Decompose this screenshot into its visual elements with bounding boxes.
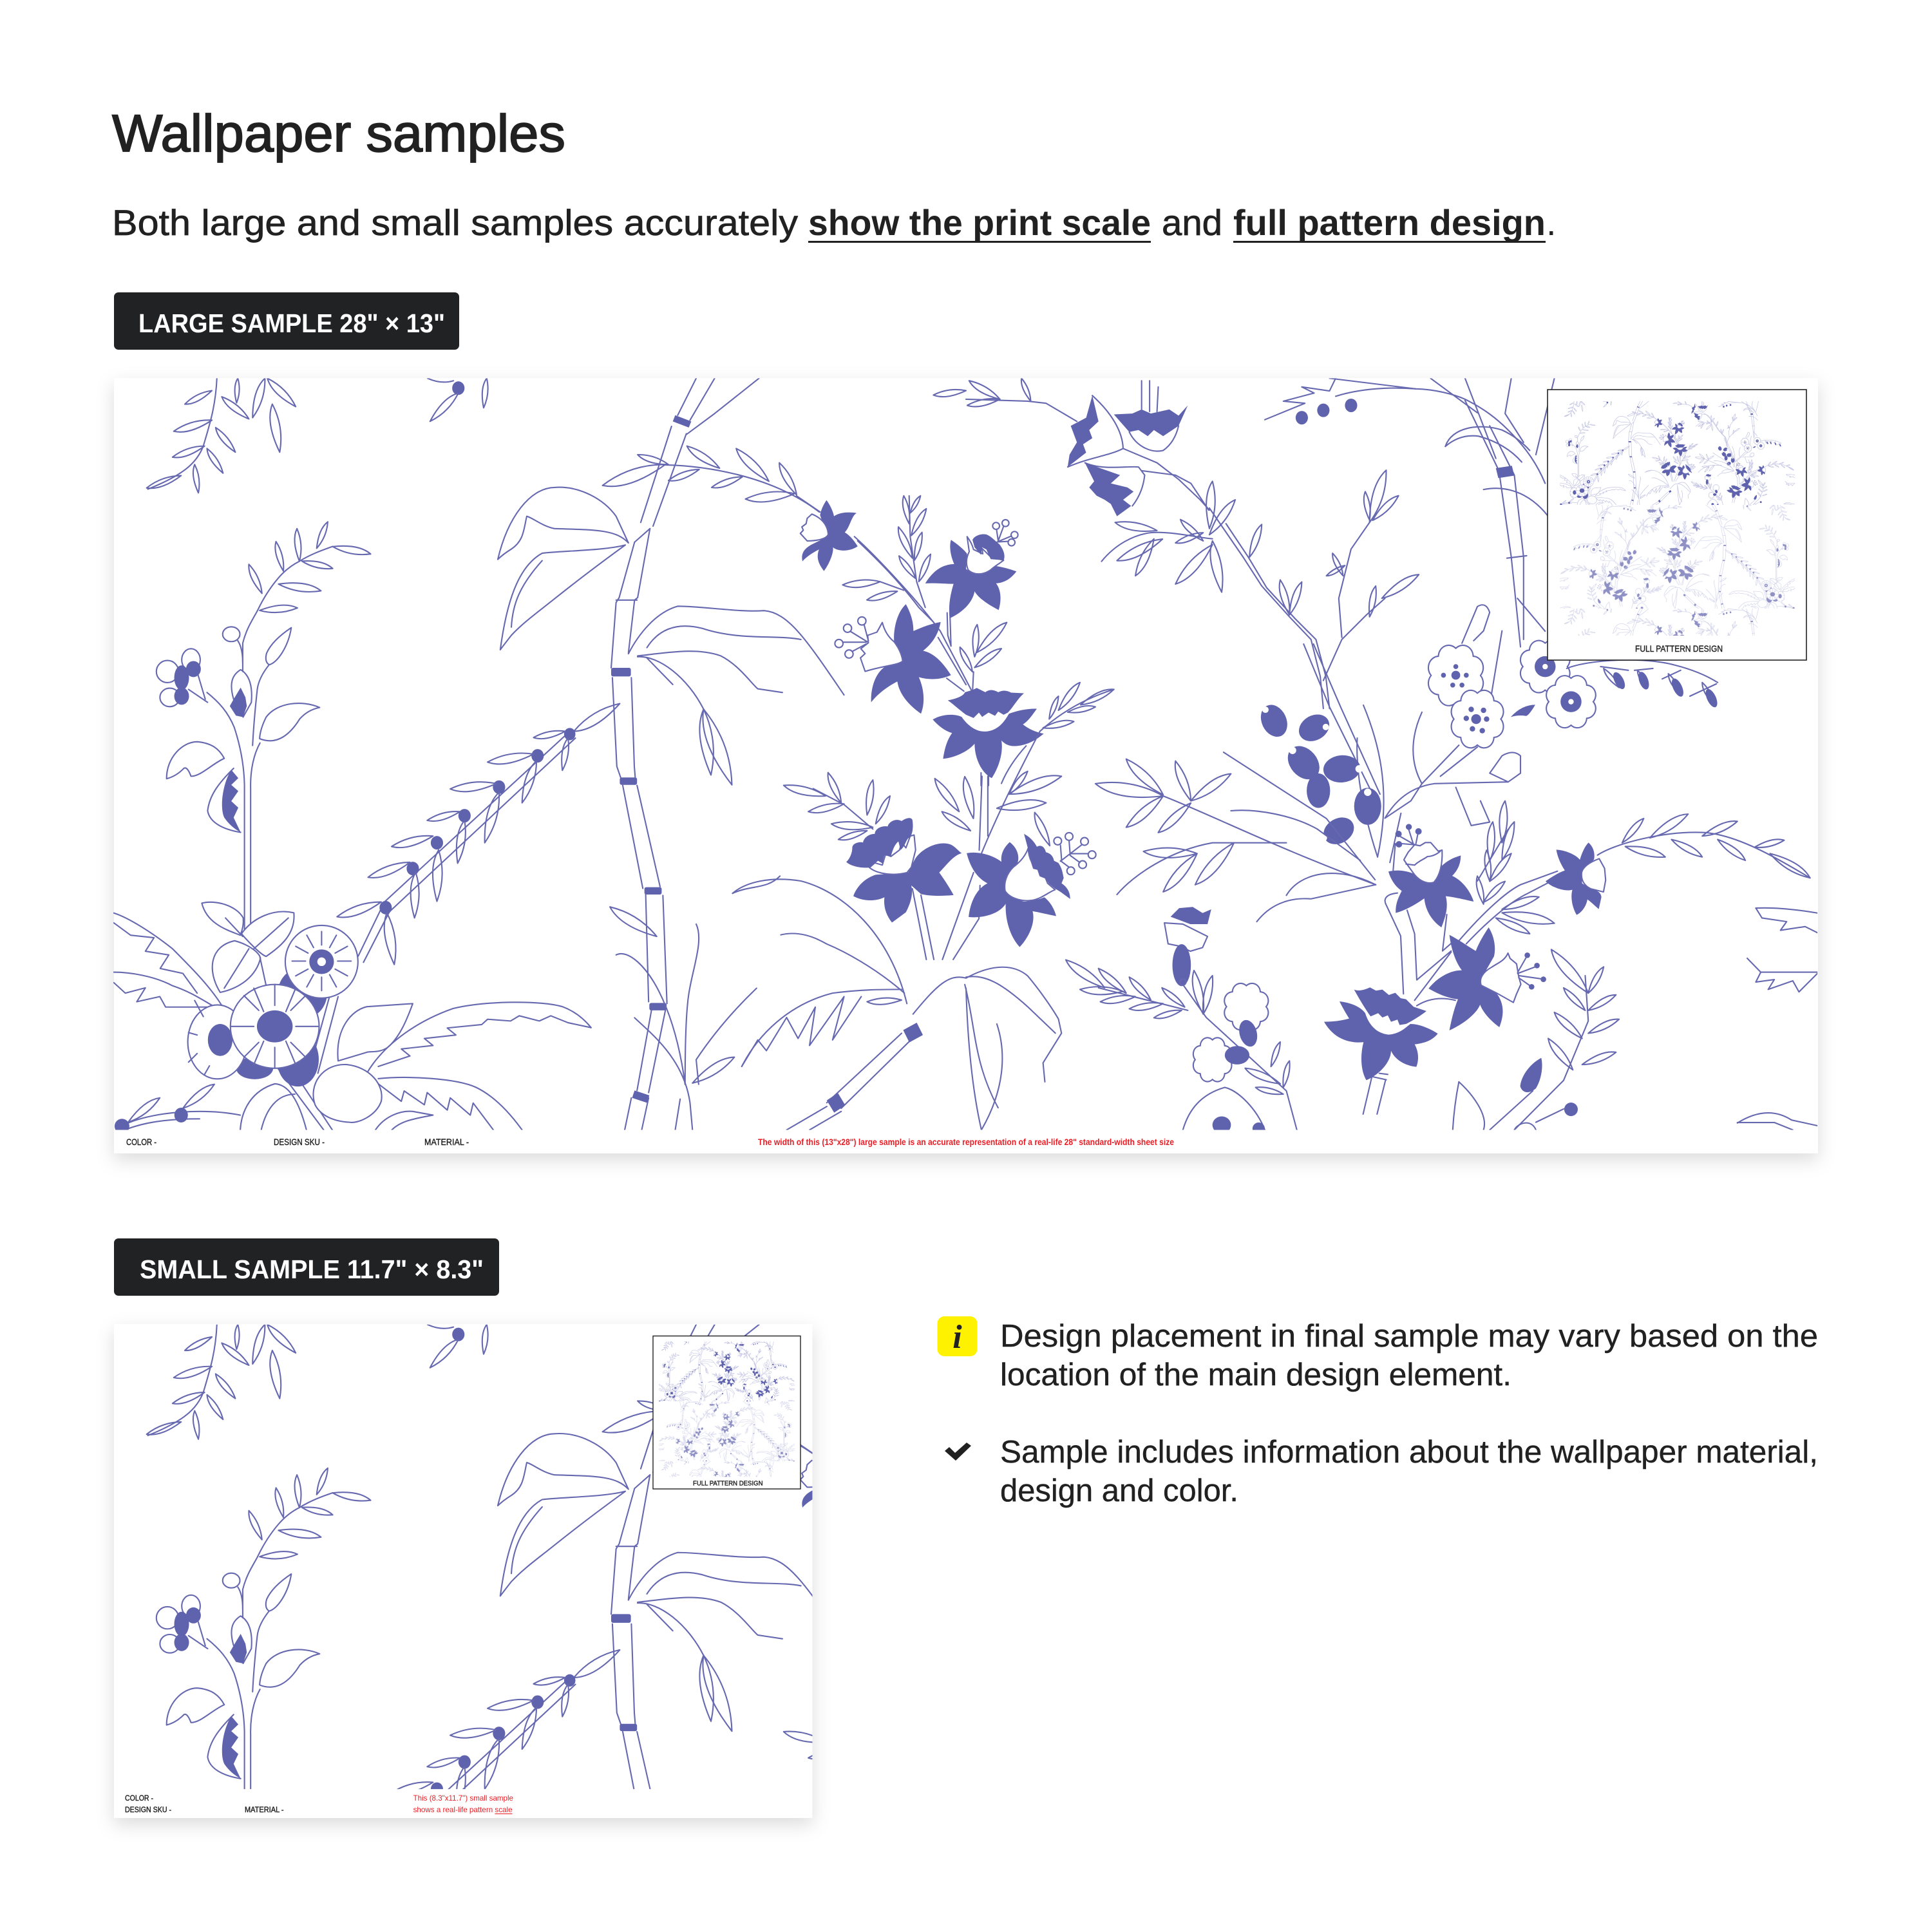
flower 9 — [1546, 842, 1605, 915]
lower left ferns — [114, 913, 591, 1133]
diagonal branch with nodes — [336, 699, 623, 965]
top middle sprig — [427, 378, 489, 424]
subtitle: Both large and small samples accurately — [112, 202, 798, 243]
lower left large leaves — [202, 902, 382, 1122]
small sample footer labels: shows a real-life pattern scale — [413, 1805, 513, 1814]
central flower 2 — [925, 520, 1018, 618]
panel: large sample — [108, 378, 1824, 1166]
large sample floral artwork — [113, 378, 1817, 1130]
badge: large sample: LARGE SAMPLE 28" × 13" — [138, 308, 445, 338]
lower right sprig — [1453, 947, 1620, 1130]
top left sprig — [146, 376, 298, 493]
central flower 4 — [933, 688, 1044, 786]
lower left round flowers — [188, 925, 358, 1086]
top right twig with berries — [1265, 378, 1555, 705]
large sample footer labels — [126, 1137, 1174, 1147]
small sample footer labels: DESIGN SKU - — [125, 1805, 171, 1814]
stems around flower 8 — [1386, 904, 1403, 994]
large sample footer labels: MATERIAL - — [424, 1137, 469, 1147]
badge: large sample — [114, 292, 459, 350]
flower 11 — [1428, 927, 1546, 1030]
note: sample information: design and color. — [1000, 1473, 1238, 1508]
sprig left of flower 5 — [782, 772, 893, 842]
centre right branches — [1101, 469, 1421, 708]
note: design placement: location of the main design element. — [1000, 1358, 1511, 1392]
bamboo main cane lower — [625, 887, 667, 1130]
large sample footer labels: DESIGN SKU - — [274, 1137, 325, 1147]
small sample footer labels — [125, 1794, 513, 1814]
small sample inset: full pattern design — [650, 1311, 804, 1522]
flower 8 — [1385, 824, 1473, 927]
carnation and lower sprig — [1063, 907, 1297, 1130]
twig with dark buds — [1567, 660, 1719, 709]
icon: yellow info badge: i — [952, 1319, 962, 1356]
central flowers 2, 3 and 4 with sprig — [835, 495, 1044, 786]
large sample footer labels: COLOR - — [126, 1137, 156, 1147]
note: sample information — [945, 1435, 1818, 1508]
note: sample information: Sample includes information about the wallpaper material, — [1000, 1435, 1818, 1470]
badge: small sample — [114, 1238, 499, 1296]
central lower leaves and stem — [732, 876, 1061, 1130]
central flower 3 — [835, 604, 951, 714]
large sample footer labels: The width of this (13"x28") large sample is an accurate representation of a real-life 28" standard-width sheet size — [758, 1137, 1174, 1147]
note: design placement: Design placement in final sample may vary based on the — [1000, 1319, 1818, 1354]
small sample footer labels: This (8.3"x11.7") small sample — [413, 1794, 513, 1803]
bamboo leaves — [498, 452, 844, 788]
large sample inset: full pattern design — [1544, 349, 1811, 713]
round flowers — [1428, 641, 1596, 748]
subtitle: . — [1546, 202, 1557, 243]
title: Wallpaper samples — [112, 104, 565, 163]
top centre flowers — [933, 377, 1209, 516]
icon: yellow info badge — [938, 1316, 978, 1356]
panel: small sample — [0, 945, 940, 1911]
bamboo main cane upper — [611, 378, 715, 888]
bamboo lower side leaves — [607, 903, 757, 1130]
lower small flowers — [1183, 983, 1292, 1135]
branch to the top right of bamboo — [665, 378, 819, 512]
central sprig — [842, 495, 1009, 694]
right edge ferns — [1738, 908, 1817, 1130]
badge: small sample: SMALL SAMPLE 11.7" × 8.3" — [140, 1255, 484, 1284]
subtitle: full pattern design — [1233, 202, 1546, 243]
small sample footer labels: COLOR - — [125, 1794, 153, 1803]
subtitle: show the print scale — [808, 202, 1151, 243]
stem and sprig right of flower 4 — [931, 680, 1115, 853]
icon: check mark — [945, 1443, 971, 1461]
left plant upper — [156, 521, 372, 936]
dark bud — [1520, 1058, 1542, 1092]
subtitle: and — [1162, 202, 1222, 243]
central flowers 5 and 6 — [846, 811, 1096, 960]
central flower 1 — [797, 496, 940, 631]
flower 10 — [1324, 987, 1438, 1114]
subtitle — [112, 202, 1557, 243]
dark berries cluster — [1256, 644, 1520, 862]
note: design placement — [938, 1316, 1818, 1392]
sprig right of flower 8 and branch to flower 9 — [1459, 800, 1812, 944]
left branches of right plant — [1094, 752, 1376, 922]
large sample inset: full pattern design: FULL PATTERN DESIGN — [1635, 643, 1723, 654]
right plant flowers 8, 9, 10 and 11 — [1324, 824, 1605, 1114]
small sample floral artwork — [0, 945, 940, 1911]
small sample inset: full pattern design: FULL PATTERN DESIGN — [693, 1480, 762, 1488]
small sample footer labels: MATERIAL - — [245, 1805, 283, 1814]
